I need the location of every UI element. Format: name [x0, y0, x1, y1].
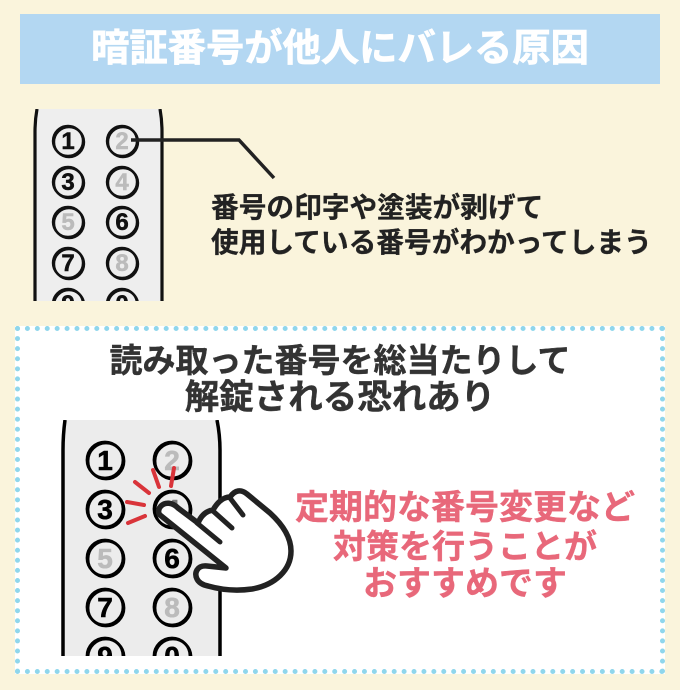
wear description text: 使用している番号がわかってしまう	[211, 227, 652, 258]
panel: worn keypad illustration	[33, 109, 276, 301]
panel: worn keypad illustration: 1	[61, 128, 75, 155]
keypad with pressing hand illustration: 9	[97, 641, 113, 672]
keypad with pressing hand illustration: 3	[97, 494, 113, 525]
panel: worn keypad illustration: 6	[115, 209, 129, 236]
panel: worn keypad illustration: 5	[61, 209, 75, 236]
recommendation text	[295, 489, 635, 603]
panel: worn keypad illustration: 7	[61, 250, 75, 277]
wear description text: 番号の印字や塗装が剥げて	[211, 192, 543, 223]
recommendation text: 対策を行うことが	[333, 528, 597, 564]
icon: red impact lines	[127, 468, 174, 523]
keypad with pressing hand illustration	[61, 420, 294, 656]
panel: worn keypad illustration: 3	[61, 169, 75, 196]
recommendation text: 定期的な番号変更など	[295, 489, 635, 527]
warning heading	[109, 342, 570, 417]
title banner	[20, 14, 660, 84]
warning heading: 解錠される恐れあり	[185, 379, 495, 417]
keypad with pressing hand illustration: 5	[97, 543, 113, 574]
keypad with pressing hand illustration: 7	[97, 592, 113, 623]
panel: brute force warning	[15, 326, 665, 674]
icon: pointing hand	[159, 491, 291, 590]
panel: worn keypad illustration: 2	[115, 128, 129, 155]
keypad with pressing hand illustration: 6	[164, 543, 180, 574]
panel: worn keypad illustration: 8	[115, 250, 129, 277]
keypad with pressing hand illustration: 4	[164, 494, 180, 525]
warning heading: 読み取った番号を総当たりして	[109, 342, 570, 379]
keypad with pressing hand illustration: 8	[164, 592, 180, 623]
title text: 暗証番号が他人にバレる原因	[91, 27, 589, 70]
wear description text	[211, 192, 652, 258]
keypad with pressing hand illustration: 0	[164, 641, 180, 672]
recommendation text: おすすめです	[363, 565, 567, 603]
keypad with pressing hand illustration: 1	[97, 445, 113, 476]
keypad with pressing hand illustration: 2	[164, 445, 180, 476]
panel: worn keypad illustration: 4	[115, 169, 129, 196]
